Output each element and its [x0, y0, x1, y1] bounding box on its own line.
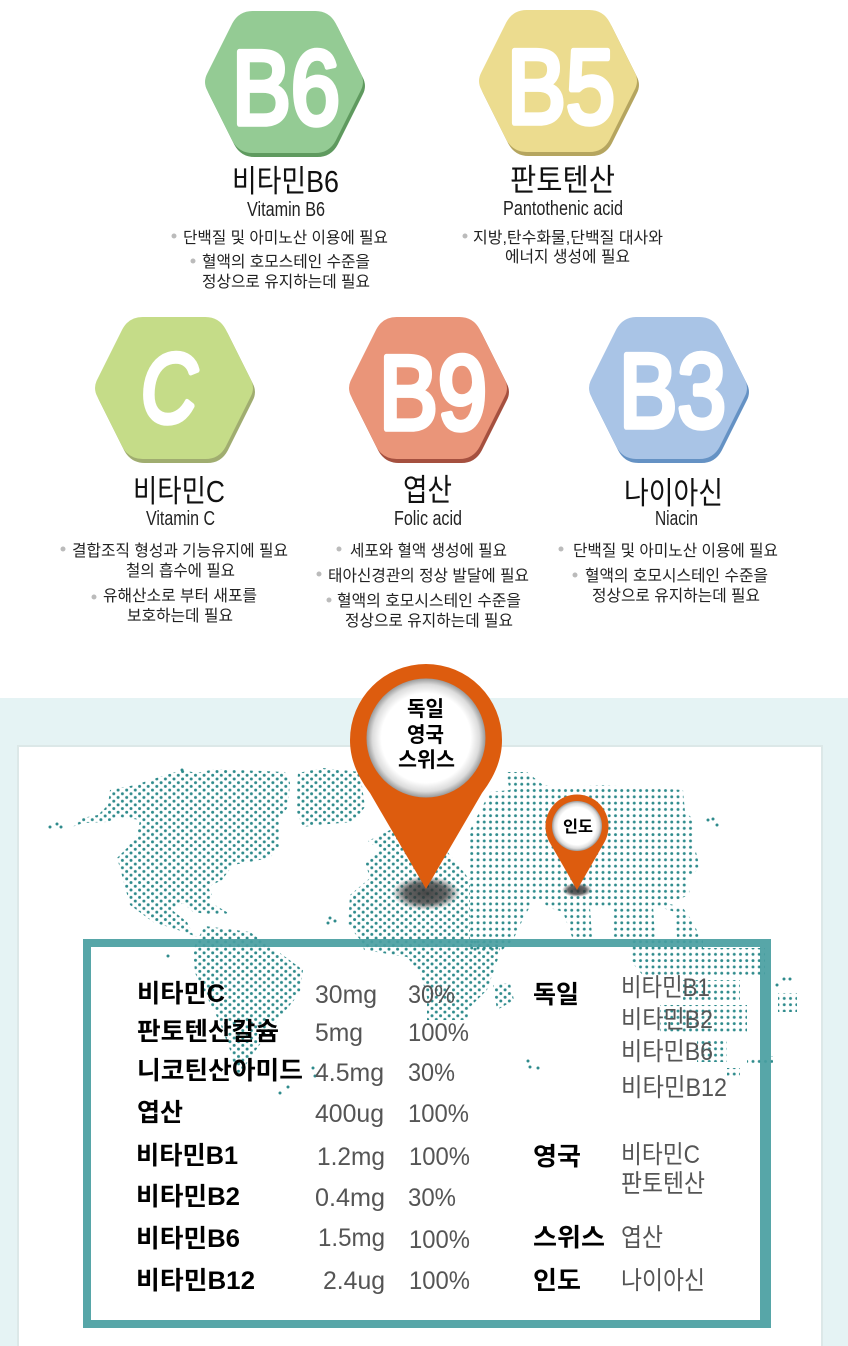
description: 에너지 생성에 필요: [505, 248, 630, 266]
subtitle: Vitamin B6: [247, 199, 325, 221]
table: ingredient amounts: 100%: [408, 1100, 469, 1128]
map pin: Germany, UK, Switzerland: [350, 664, 502, 910]
table: origin by country: 비타민B6: [621, 1038, 713, 1066]
map pin: India: [546, 795, 608, 897]
description: [60, 542, 288, 625]
table: origin by country: [533, 974, 727, 1295]
icon: B9 hexagon: B9: [379, 335, 487, 452]
table: ingredient amounts: 1.2mg: [317, 1143, 385, 1171]
table: origin by country: 비타민B12: [621, 1074, 727, 1102]
description: 정상으로 유지하는데 필요: [345, 612, 513, 630]
subtitle: Vitamin C: [146, 508, 215, 530]
table: ingredient amounts: 1.5mg: [318, 1224, 385, 1252]
icon: B5 hexagon: B5: [507, 29, 615, 146]
heading: pantothenic acid: 판토텐산: [510, 163, 615, 198]
description: 혈액의 호모스테인 수준을: [202, 253, 370, 271]
map pin: India: 인도: [563, 818, 593, 836]
heading: folic acid: 엽산: [403, 473, 452, 508]
description: 혈액의 호모시스테인 수준을: [337, 592, 521, 610]
table: ingredient amounts: 30%: [408, 1184, 456, 1212]
table: ingredient amounts: 판토텐산칼슘: [137, 1018, 279, 1046]
table: ingredient amounts: 비타민C: [137, 980, 225, 1008]
table: ingredient amounts: 100%: [408, 1019, 469, 1047]
description: 보호하는데 필요: [127, 607, 233, 625]
table: origin by country: 영국: [533, 1143, 581, 1171]
table: origin by country: 나이아신: [621, 1267, 705, 1295]
subtitle: Pantothenic acid: [503, 198, 623, 220]
icon: B6 hexagon: [205, 11, 365, 157]
table: origin by country: 인도: [533, 1267, 581, 1295]
panel: vitamin B6: [172, 11, 388, 291]
table: ingredient amounts: 100%: [409, 1143, 470, 1171]
table: ingredient amounts: 100%: [409, 1226, 470, 1254]
icon: B9 hexagon: [349, 317, 509, 463]
panel: vitamin B9: [316, 317, 529, 630]
description: [316, 542, 529, 630]
panel: vitamin B5: [462, 10, 663, 266]
description: 철의 흡수에 필요: [126, 562, 235, 580]
table: origin by country: 엽산: [621, 1224, 663, 1252]
description: 혈액의 호모시스테인 수준을: [585, 567, 768, 585]
table: ingredient amounts: 비타민B12: [136, 1267, 255, 1295]
panel: origin background: [0, 698, 848, 1346]
chart: dotted world map: [48, 768, 797, 1094]
description: 정상으로 유지하는데 필요: [202, 273, 370, 291]
map pin: Germany, UK, Switzerland: 영국: [407, 724, 444, 747]
description: [462, 229, 663, 266]
icon: C hexagon: [95, 317, 255, 463]
icon: B3 hexagon: B3: [619, 333, 726, 450]
description: [558, 542, 778, 605]
table: ingredient amounts: 니코틴산아미드: [137, 1057, 303, 1085]
description: 결합조직 형성과 기능유지에 필요: [72, 542, 288, 560]
table: origin by country: 독일: [533, 981, 579, 1009]
table: ingredient amounts: 4.5mg: [315, 1059, 384, 1087]
panel: white map card: [18, 746, 822, 1346]
table: ingredient amounts: 0.4mg: [315, 1184, 385, 1212]
icon: C hexagon: C: [141, 333, 198, 443]
table: ingredient amounts: 비타민B2: [136, 1183, 240, 1211]
table: ingredient amounts: 비타민B6: [136, 1225, 240, 1253]
table: ingredient amounts: [136, 980, 470, 1295]
table: ingredient amounts: 400ug: [315, 1100, 384, 1128]
icon: B6 hexagon: B6: [232, 30, 340, 147]
panel: vitamin B3: [558, 317, 778, 605]
icon: B3 hexagon: [589, 317, 749, 463]
description: 정상으로 유지하는데 필요: [592, 587, 760, 605]
description: 세포와 혈액 생성에 필요: [350, 542, 507, 560]
heading: niacin: 나이아신: [624, 476, 723, 511]
heading: vitamin C: 비타민C: [133, 474, 225, 509]
table: ingredient amounts: 30mg: [315, 981, 377, 1009]
table: origin by country: 판토텐산: [621, 1170, 705, 1198]
table: origin by country: 비타민B1: [621, 974, 710, 1002]
panel: vitamin C: [60, 317, 288, 625]
description: 태아신경관의 정상 발달에 필요: [328, 567, 529, 585]
description: 단백질 및 아미노산 이용에 필요: [183, 229, 388, 247]
icon: B5 hexagon: [479, 10, 639, 156]
map pin: Germany, UK, Switzerland: 스위스: [398, 749, 455, 772]
table: ingredient amounts: 엽산: [137, 1099, 183, 1127]
description: 단백질 및 아미노산 이용에 필요: [573, 542, 778, 560]
table: ingredient amounts: 2.4ug: [323, 1267, 385, 1295]
table: origin by country: 비타민B2: [621, 1006, 713, 1034]
subtitle: Niacin: [655, 508, 698, 530]
description: [172, 229, 388, 291]
table: origin by country: 비타민C: [621, 1141, 700, 1169]
table: ingredient amounts: 100%: [409, 1267, 470, 1295]
panel: data table frame: [83, 939, 771, 1328]
table: origin by country: 스위스: [533, 1224, 605, 1252]
heading: vitamin B6: 비타민B6: [232, 164, 339, 199]
table: ingredient amounts: 비타민B1: [136, 1142, 238, 1170]
table: ingredient amounts: 5mg: [315, 1019, 363, 1047]
description: 지방,탄수화물,단백질 대사와: [473, 229, 663, 247]
subtitle: Folic acid: [394, 508, 462, 530]
table: ingredient amounts: 30%: [408, 1059, 455, 1087]
table: ingredient amounts: 30%: [408, 981, 455, 1009]
description: 유해산소로 부터 새포를: [103, 587, 257, 605]
map pin: Germany, UK, Switzerland: 독일: [407, 698, 444, 721]
